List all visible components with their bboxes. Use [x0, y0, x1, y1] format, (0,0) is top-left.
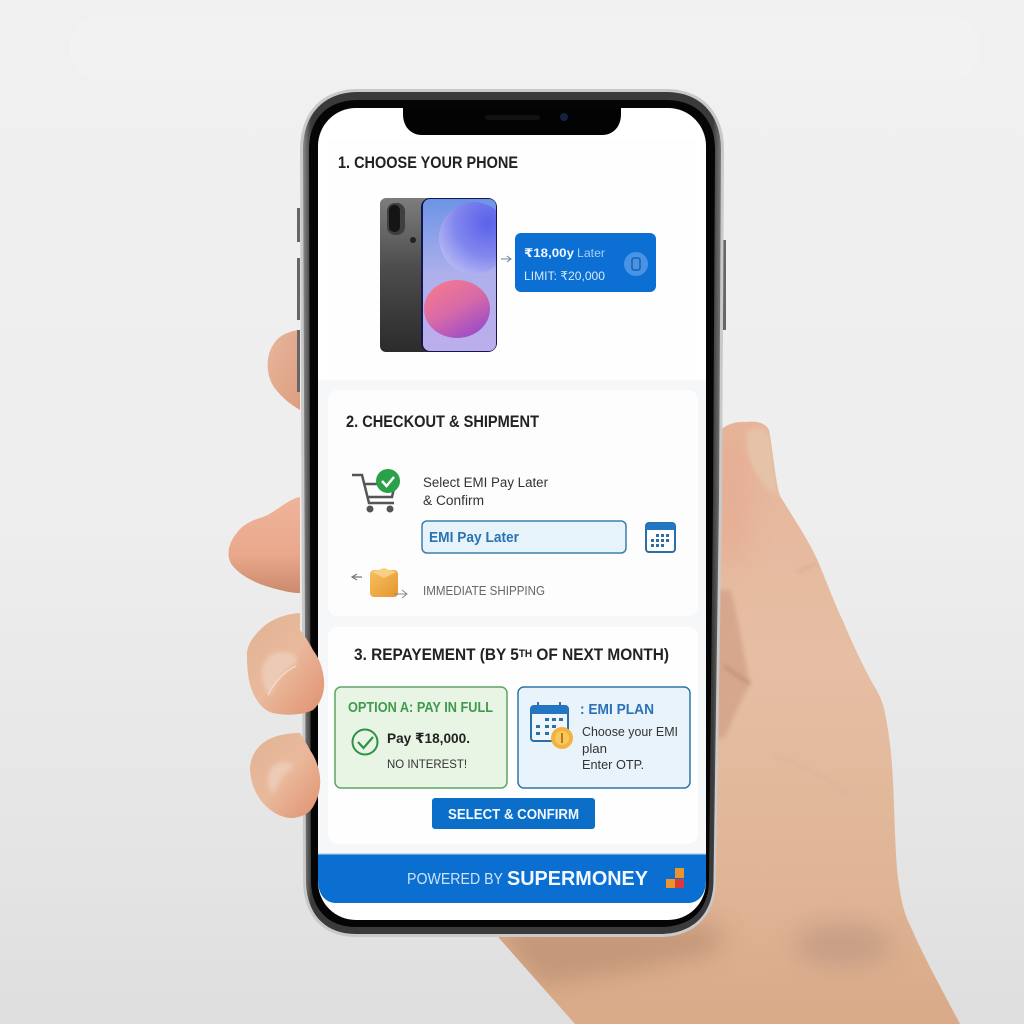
option A: pay in full: Pay ₹18,000.: [387, 730, 470, 746]
heading: step 3: TH: [519, 648, 532, 660]
icon: calendar: [646, 523, 675, 552]
button: select and confirm: [432, 798, 595, 829]
phone: [297, 89, 726, 937]
heading: step 2: 2. CHECKOUT & SHIPMENT: [346, 412, 540, 431]
option B: EMI plan: [518, 687, 690, 788]
option A: pay in full: NO INTEREST!: [387, 757, 467, 771]
option A: pay in full: OPTION A: PAY IN FULL: [348, 700, 493, 716]
heading: step 1: 1. CHOOSE YOUR PHONE: [338, 153, 518, 172]
hand: fingers behind the phone: [229, 330, 300, 593]
instruction text: Select EMI Pay Later: [423, 475, 548, 490]
arrow: [501, 256, 511, 262]
heading: step 3: OF NEXT MONTH): [532, 645, 669, 664]
notch: [403, 108, 621, 135]
panel: checkout and shipment: & Confirm: [423, 493, 484, 508]
footer bar: SUPERMONEY: [507, 868, 649, 890]
limit card: Later: [577, 246, 605, 260]
ring finger: [250, 733, 320, 818]
option A: pay in full: [335, 687, 507, 788]
hand: fingers over the phone: [247, 613, 324, 818]
option B: EMI plan: Choose your EMI: [582, 725, 678, 739]
phone frame: [300, 89, 724, 937]
panel: checkout and shipment: [328, 390, 698, 616]
heading: step 3: 3. REPAYEMENT (BY 5: [354, 645, 536, 664]
phone product image: [380, 198, 509, 352]
limit card: [515, 233, 656, 292]
icon: check circle: [352, 730, 378, 754]
limit card: LIMIT: ₹20,000: [524, 269, 605, 283]
icon: cart with check: [352, 469, 400, 512]
panel: repayment: [328, 627, 698, 844]
footer bar: [318, 853, 706, 903]
phone side buttons: [297, 208, 726, 392]
EMI pay later field: [422, 521, 626, 553]
icon: calendar with coin: [531, 702, 573, 749]
limit card: ₹18,00y: [524, 246, 574, 260]
shipping text: IMMEDIATE SHIPPING: [423, 584, 545, 598]
option B: EMI plan: Enter OTP.: [582, 758, 644, 772]
logo: supermoney blocks: [666, 868, 684, 888]
EMI pay later field: EMI Pay Later: [429, 530, 519, 546]
option B: EMI plan: : EMI PLAN: [580, 702, 654, 718]
middle finger: [247, 613, 324, 715]
panel: choose your phone: [338, 156, 656, 352]
button: select and confirm: SELECT & CONFIRM: [448, 807, 579, 823]
hand: palm and thumb: [490, 415, 970, 1024]
footer bar: POWERED BY: [407, 871, 503, 888]
option B: EMI plan: plan: [582, 742, 607, 756]
screen: [318, 108, 706, 920]
icon: shipping box: [352, 568, 407, 598]
